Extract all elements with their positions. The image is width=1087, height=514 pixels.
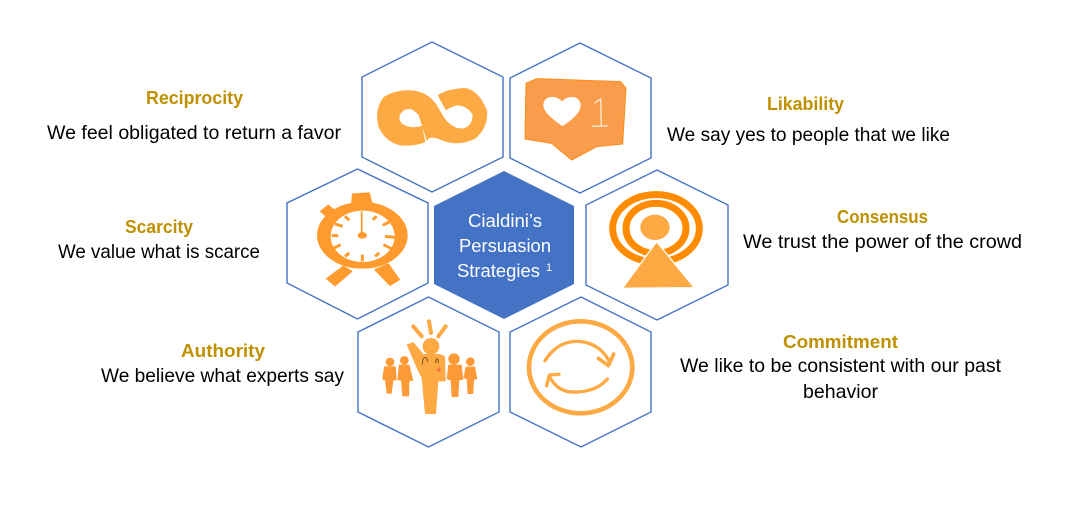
panel: reciprocity [47,42,503,192]
panel: authority [101,297,499,447]
title: 1 [546,262,552,274]
text: scarcity description: We value what is scarce [58,241,260,263]
heading: likability: Likability [767,94,844,114]
text: reciprocity description: We feel obligated to return a favor [47,122,341,144]
title: Strategies [457,260,540,281]
heading: commitment: Commitment [783,332,898,352]
text: consensus description: We trust the power of the crowd [743,231,1022,253]
title [457,210,552,281]
title: Persuasion [459,235,551,256]
icon: infinity [377,88,487,146]
icon: crowd broadcast [613,195,699,288]
panel: scarcity [58,169,428,319]
icon: cycle arrows [529,321,632,413]
hexagon: consensus [586,170,728,320]
icon: like notification [525,79,626,160]
heading: scarcity: Scarcity [125,217,193,237]
hexagon: commitment [510,297,651,447]
hexagon: scarcity [287,169,428,319]
heading: consensus: Consensus [837,207,928,227]
text: commitment description: We like to be consistent with our past [680,355,1002,377]
panel: likability [510,43,950,193]
title: Cialdini’s [468,210,542,231]
hexagon: reciprocity [362,42,503,192]
heading: authority: Authority [181,341,265,361]
panel: center hexagon [434,171,574,319]
hexagon: likability [510,43,651,193]
text: authority description: We believe what experts say [101,365,344,387]
text: commitment description: behavior [803,381,878,403]
icon: alarm clock [318,193,407,286]
panel: commitment [510,297,1002,447]
icon: expert with group [382,321,477,414]
heading: reciprocity: Reciprocity [146,88,243,108]
hexagon: authority [358,297,499,447]
text: likability description: We say yes to people that we like [667,124,950,146]
hexagon: center [434,171,574,319]
text: commitment description [680,355,1002,403]
panel: consensus [586,170,1022,320]
